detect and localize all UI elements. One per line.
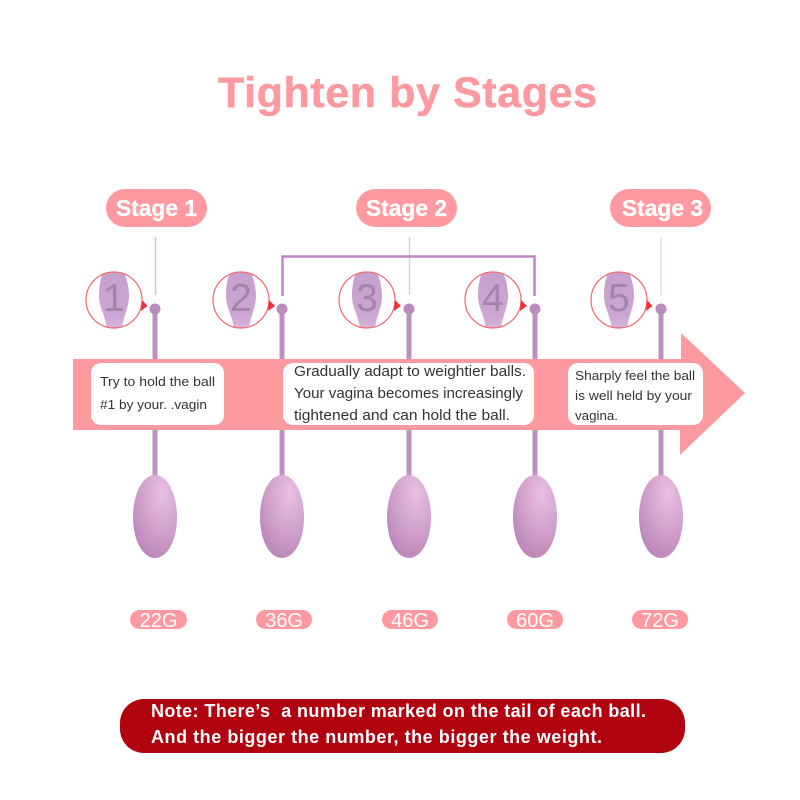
- magnifier 3: [339, 271, 401, 330]
- stage 2 connector line: [408, 237, 410, 295]
- text box: stage 1: [91, 363, 224, 425]
- weight 46G: [382, 610, 438, 632]
- weight 22G: 22G: [140, 610, 177, 632]
- weight 36G: 36G: [265, 610, 303, 632]
- magnifier 1: [86, 271, 148, 330]
- text box: stage 2: Your vagina becomes increasingly: [294, 386, 524, 402]
- stage 1 connector line: [154, 237, 156, 295]
- magnifier 5: 5: [608, 277, 630, 320]
- stage 3 connector line: [660, 237, 662, 295]
- text box: stage 3: is well held by your: [575, 388, 693, 403]
- text box: stage 2: Gradually adapt to weightier balls.: [294, 364, 526, 380]
- magnifier 4: [465, 271, 527, 330]
- text box: stage 2: [283, 363, 534, 425]
- text box: stage 2: tightened and can hold the ball.: [294, 408, 510, 424]
- stage 2 bracket: [282, 256, 534, 296]
- weight 60G: 60G: [516, 610, 554, 632]
- weight 22G: [130, 610, 187, 632]
- ball 1: [133, 430, 177, 558]
- ball 2 rod: [276, 304, 288, 478]
- weight 46G: 46G: [391, 610, 429, 632]
- text box: stage 3: [568, 363, 703, 425]
- magnifier 4: 4: [482, 277, 504, 320]
- text box: stage 1: Try to hold the ball: [100, 374, 215, 389]
- text box: stage 3: vagina.: [575, 408, 618, 423]
- ball 1 rod: [150, 304, 160, 478]
- note banner: Note: There’s a number marked on the tail of each ball.: [151, 701, 646, 721]
- weight 60G: [507, 610, 563, 632]
- note banner: [120, 699, 685, 753]
- magnifier 5: [591, 271, 652, 330]
- ball 3: [387, 430, 431, 558]
- stage 2 label: [356, 189, 457, 227]
- weight 72G: 72G: [641, 610, 679, 632]
- ball 2: [260, 430, 304, 558]
- weight 36G: [256, 610, 312, 632]
- magnifier 2: [213, 271, 275, 330]
- stage 3 label: Stage 3: [622, 195, 703, 221]
- ball 3 rod: [404, 304, 414, 478]
- stage 1 label: Stage 1: [116, 195, 197, 221]
- stage 1 label: [106, 189, 207, 227]
- stage 3 label: [610, 189, 711, 227]
- magnifier 3: 3: [356, 277, 378, 320]
- weight 72G: [632, 610, 688, 632]
- magnifier 1: 1: [103, 277, 125, 320]
- ball 4: [513, 430, 557, 558]
- note banner: And the bigger the number, the bigger the weight.: [151, 727, 602, 747]
- magnifier 2: 2: [230, 277, 252, 320]
- ball 4 rod: [530, 304, 540, 478]
- stage 2 label: Stage 2: [366, 195, 447, 221]
- title: Tighten by Stages: [218, 69, 597, 117]
- ball 5: [639, 430, 683, 558]
- timeline arrow: [73, 333, 745, 455]
- ball 5 rod: [656, 304, 666, 478]
- text box: stage 1: #1 by your. .vagin: [100, 397, 207, 412]
- text box: stage 3: Sharply feel the ball: [575, 368, 695, 383]
